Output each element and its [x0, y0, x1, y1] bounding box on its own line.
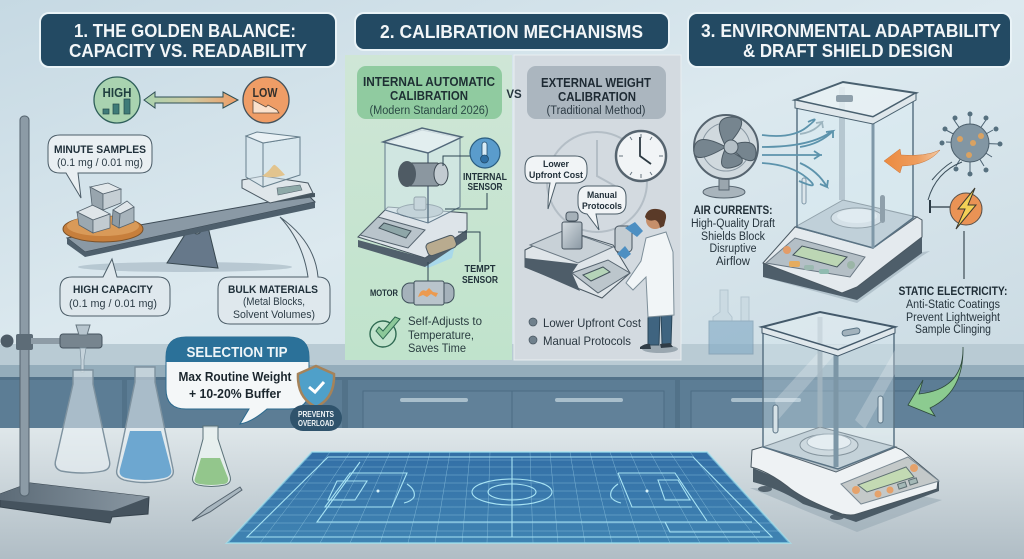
icon: shield with check [298, 366, 334, 407]
bullets: external traits: Lower Upfront Cost [543, 316, 642, 330]
illustration: external weight balance [525, 212, 630, 298]
illustration: scientist [615, 209, 678, 353]
callout: selection tip [166, 337, 309, 424]
label: internal sensor: SENSOR [468, 181, 503, 193]
heading 1: CAPACITY VS. READABILITY [69, 41, 307, 61]
sub-heading: external weight calibration: EXTERNAL WEIGHT [541, 76, 651, 90]
callout: selection tip: SELECTION TIP [186, 344, 288, 361]
heading 3 [688, 13, 1011, 67]
icon: high readability badge: HIGH [102, 86, 132, 100]
label: internal sensor: INTERNAL [463, 171, 507, 183]
arrows: air currents [762, 119, 833, 187]
icon: motor cylinder [402, 281, 454, 305]
label: tempt sensor: TEMPT [464, 263, 496, 275]
label: motor: MOTOR [370, 288, 398, 299]
callout: bulk materials [218, 217, 330, 324]
sub-heading: external weight calibration [527, 66, 666, 119]
text: static electricity: Prevent Lightweight [906, 312, 1001, 324]
icon: charged particle [928, 112, 1002, 200]
icon: fan [694, 115, 758, 198]
heading 3: & DRAFT SHIELD DESIGN [743, 41, 953, 61]
callout: bulk materials: BULK MATERIALS [228, 284, 318, 296]
text: self-adjust benefit: Temperature, [408, 328, 474, 342]
label: tempt sensor: SENSOR [462, 274, 498, 286]
icon: low readability badge [243, 77, 289, 123]
badge: prevents overload: OVERLOAD [298, 419, 334, 428]
small balance with powder [242, 132, 315, 203]
background: bench and cabinets [0, 344, 1024, 559]
badge: prevents overload [290, 405, 342, 431]
illustration: blue flask [117, 367, 173, 482]
text: air currents: Disruptive [710, 243, 756, 255]
text: air currents: Airflow [716, 256, 751, 268]
illustration: internal calibration balance [358, 128, 487, 284]
callout: bulk materials: Solvent Volumes) [233, 309, 315, 321]
heading 1: 1. THE GOLDEN BALANCE: [74, 21, 296, 41]
heading 2: 2. CALIBRATION MECHANISMS [380, 22, 643, 42]
callout: minute samples: (0.1 mg / 0.01 mg) [57, 157, 143, 169]
icon: pen [192, 487, 242, 521]
illustration: upper balance with draft shield [763, 82, 930, 303]
label: tempt sensor [462, 263, 498, 286]
callout: lower upfront cost: Upfront Cost [529, 170, 584, 181]
sub-heading: internal automatic calibration [357, 66, 502, 119]
callout: lower upfront cost [525, 156, 587, 209]
label: vs: VS [506, 89, 522, 101]
icon: faded large clock [547, 132, 647, 232]
icon: check mark [370, 317, 400, 347]
heading 3: 3. ENVIRONMENTAL ADAPTABILITY [701, 21, 1001, 41]
sub-heading: internal automatic calibration: CALIBRATION [390, 89, 468, 103]
callout: manual protocols: Protocols [582, 201, 622, 212]
icon: high readability badge [94, 77, 140, 123]
illustration: seesaw with cubes and balance [63, 132, 315, 272]
internal calibration column background [345, 55, 512, 360]
arrow: high to low trade-off [144, 92, 238, 108]
callout: manual protocols [578, 186, 626, 230]
heading 2 [355, 13, 669, 50]
text: self-adjust benefit: Saves Time [408, 341, 466, 355]
callout: manual protocols: Manual [587, 190, 617, 201]
cube: top [90, 183, 121, 210]
callout: high capacity: HIGH CAPACITY [73, 284, 154, 296]
text: static electricity [898, 231, 1008, 336]
sub-heading: internal automatic calibration: (Modern Standard 2026) [370, 105, 489, 117]
illustration: lower balance with draft shield [750, 312, 942, 532]
text: static electricity: Anti-Static Coatings [906, 299, 1000, 311]
faded beakers in background [709, 290, 753, 354]
text: air currents: High-Quality Draft [691, 218, 776, 230]
badge: prevents overload: PREVENTS [298, 410, 335, 419]
heading 1 [40, 13, 336, 67]
callout: selection tip: + 10-20% Buffer [189, 386, 281, 401]
callout: minute samples: MINUTE SAMPLES [54, 144, 146, 156]
callout: high capacity: (0.1 mg / 0.01 mg) [69, 298, 157, 310]
icon: thermometer [470, 138, 500, 168]
text: air currents [691, 205, 776, 268]
text: static electricity: STATIC ELECTRICITY: [898, 286, 1008, 298]
text: static electricity: Sample Clinging [915, 324, 991, 336]
icon: lightning bolt [930, 188, 982, 229]
sub-heading: external weight calibration: CALIBRATION [558, 90, 636, 104]
icon: wall clock [616, 131, 666, 181]
arrow: orange inward [884, 149, 940, 173]
label: internal sensor [463, 171, 507, 193]
arrow: green curved [908, 347, 963, 416]
icon: low readability badge: LOW [252, 86, 278, 100]
cube: lower right [112, 201, 134, 228]
illustration: empty flask [55, 370, 110, 473]
callout: selection tip: Max Routine Weight [178, 369, 292, 384]
external calibration column background [514, 55, 681, 360]
panel: section 3 environmental adaptability [688, 13, 1011, 532]
sub-heading: external weight calibration: (Traditional Method) [546, 105, 646, 117]
cube: lower left [77, 205, 110, 233]
bullets: external traits [529, 316, 642, 348]
text: self-adjust benefit: Self-Adjusts to [408, 314, 482, 328]
callout: lower upfront cost: Lower [543, 159, 569, 170]
illustration: blueprint of football pitch [227, 452, 790, 543]
bullets: external traits: Manual Protocols [543, 334, 631, 348]
text: air currents: Shields Block [701, 231, 765, 243]
text: self-adjust benefit [408, 314, 482, 355]
text: air currents: AIR CURRENTS: [694, 205, 772, 217]
panel: section 2 calibration mechanisms [345, 13, 681, 360]
panel: section 1 capacity vs readability [40, 13, 336, 324]
illustration: ring stand with clamp [0, 116, 149, 523]
illustration: green flask [193, 426, 230, 486]
sub-heading: internal automatic calibration: INTERNAL AUTOMATIC [363, 75, 495, 89]
callout: minute samples [48, 135, 152, 198]
background: lab wall [0, 0, 1024, 366]
callout: bulk materials: (Metal Blocks, [243, 296, 305, 308]
callout: high capacity [60, 259, 170, 316]
